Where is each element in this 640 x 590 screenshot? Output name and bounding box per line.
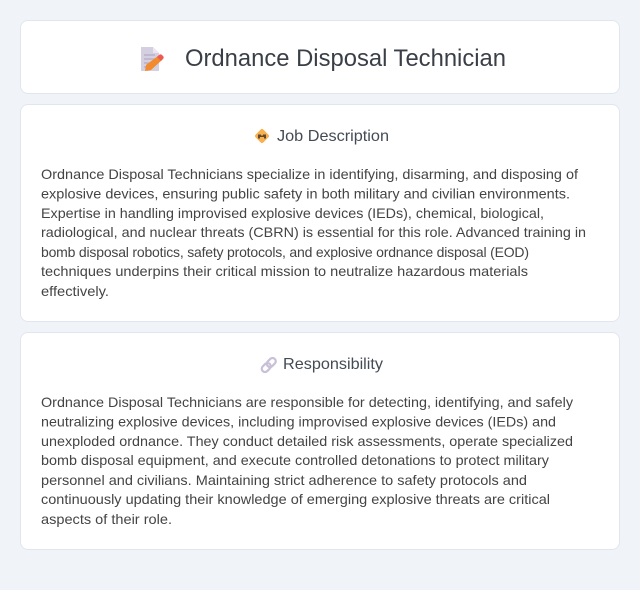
text block: job description: techniques underpins their critical mission to neutralize hazardous materials	[41, 263, 528, 279]
icon: warning diamond	[254, 128, 270, 144]
text block: responsibility: personnel and civilians. Maintaining strict adherence to safety protocols and	[41, 472, 527, 488]
text block: job description: Ordnance Disposal Technicians specialize in identifying, disarming, and disposing of	[41, 166, 578, 182]
heading: responsibility: Responsibility	[283, 356, 383, 373]
text block: responsibility: Ordnance Disposal Technicians are responsible for detecting, identifying, and safely	[41, 394, 573, 410]
title: Ordnance Disposal Technician	[185, 45, 506, 72]
text block: job description: effectively.	[41, 283, 109, 299]
heading: job description: Job Description	[277, 128, 389, 145]
panel: job description	[20, 104, 620, 322]
text block: responsibility	[41, 394, 573, 527]
icon: chain link	[260, 357, 277, 373]
text block: job description: Expertise in handling improvised explosive devices (IEDs), chemical, biological,	[41, 205, 544, 221]
panel: responsibility	[20, 332, 620, 550]
text block: responsibility: bomb disposal equipment, and execute controlled detonations to protect military	[41, 452, 549, 468]
text block: job description: radiological, and nuclear threats (CBRN) is essential for this role. Advanced training in	[41, 224, 586, 240]
text block: responsibility: aspects of their role.	[41, 511, 172, 527]
text block: job description: bomb disposal robotics, safety protocols, and explosive ordnance disposal (EOD)	[41, 244, 529, 260]
icon: document with pencil	[141, 47, 164, 71]
text block: responsibility: neutralizing explosive devices, including improvised explosive devices (IEDs) and	[41, 414, 556, 430]
panel: title card	[20, 20, 620, 94]
text block: responsibility: unexploded ordnance. They conduct detailed risk assessments, operate specialized	[41, 433, 573, 449]
text block: job description	[41, 166, 586, 299]
text block: responsibility: continuously updating their knowledge of emerging explosive threats are critical	[41, 491, 550, 507]
text block: job description: explosive devices, ensuring public safety in both military and civilian environments.	[41, 186, 570, 202]
